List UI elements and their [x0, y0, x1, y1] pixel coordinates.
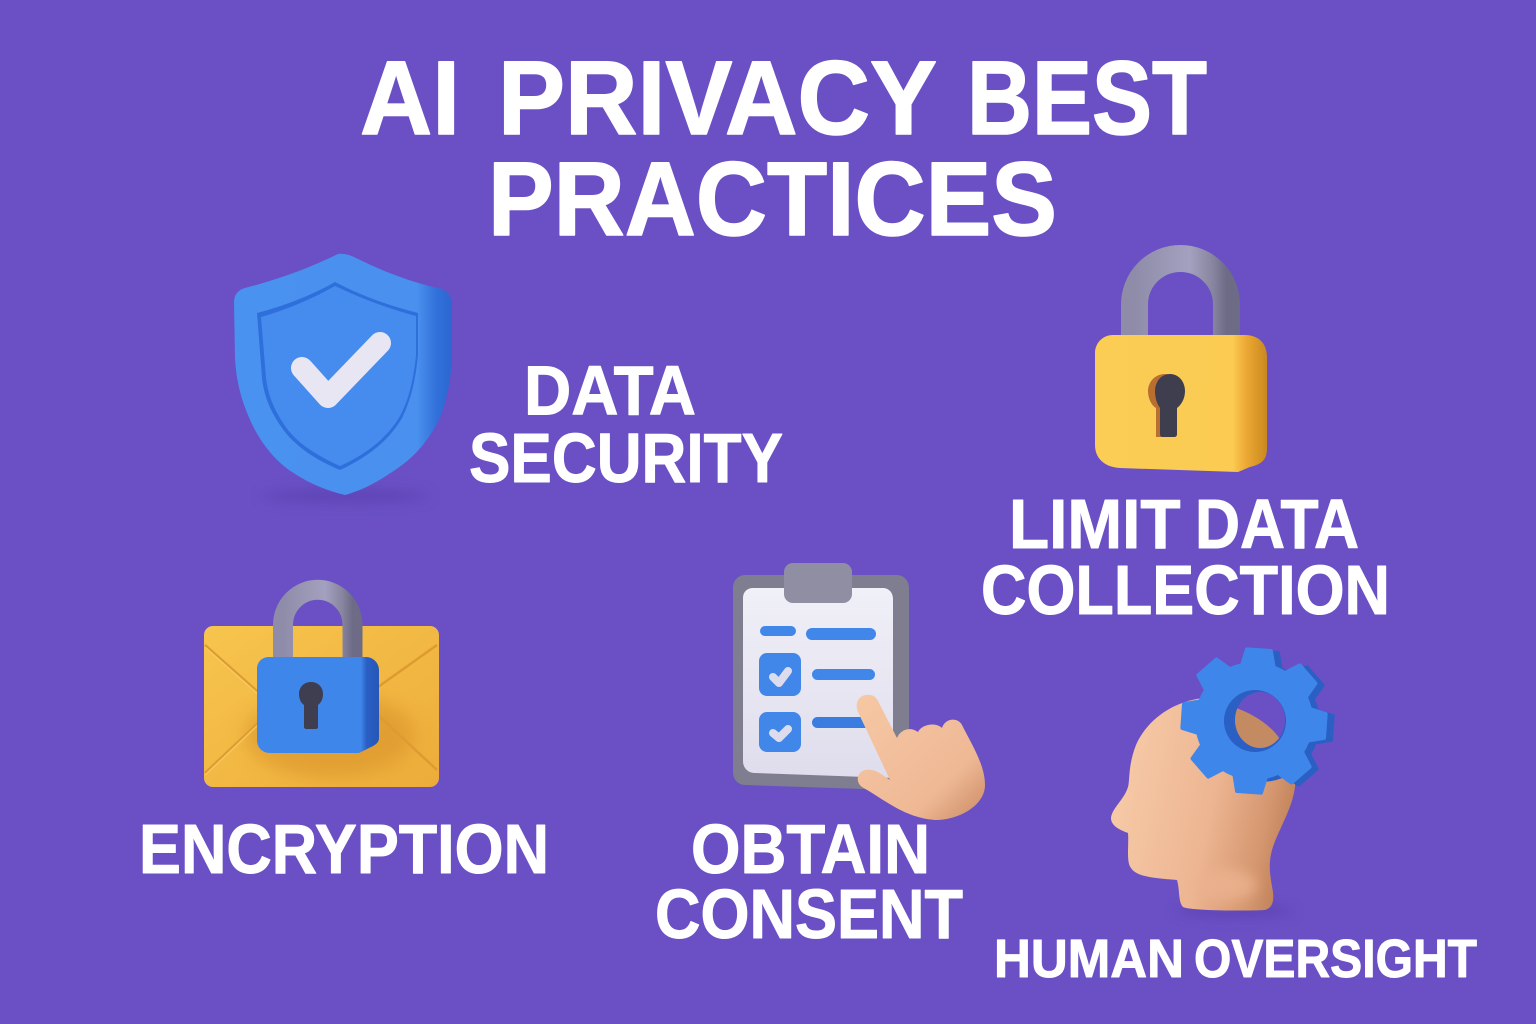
icon: shield with check	[234, 254, 452, 503]
label: data security: SECURITY	[469, 419, 783, 497]
title: PRACTICES	[488, 141, 1057, 258]
icon detail: check mark	[302, 343, 380, 397]
label: data security: DATA	[524, 352, 696, 430]
label: data security	[469, 352, 783, 497]
title: BEST	[967, 40, 1207, 157]
icon: clipboard with hand	[733, 563, 985, 820]
icon: envelope with lock	[204, 590, 439, 787]
label: human oversight: OVERSIGHT	[1194, 929, 1477, 989]
icon: yellow padlock	[1095, 258, 1267, 472]
label: limit data collection: COLLECTION	[981, 551, 1390, 629]
icon detail: pointing hand	[857, 695, 985, 820]
label: obtain consent: CONSENT	[655, 875, 963, 953]
label: human oversight: HUMAN	[994, 929, 1184, 989]
label: obtain consent: OBTAIN	[691, 810, 930, 888]
label: human oversight	[994, 929, 1477, 989]
icon: head with gear	[1111, 649, 1333, 917]
label: limit data collection: DATA	[1195, 485, 1359, 563]
icon detail: keyhole	[1148, 374, 1185, 437]
icon detail: head	[1111, 698, 1295, 911]
label: limit data collection	[981, 485, 1390, 629]
title: AI	[360, 40, 460, 157]
label: encryption: ENCRYPTION	[139, 810, 549, 888]
icon detail: gear	[1182, 649, 1333, 793]
label: limit data collection: LIMIT	[1009, 485, 1180, 563]
title	[360, 40, 1207, 258]
label: obtain consent	[655, 810, 963, 953]
icon detail: keyhole	[299, 682, 323, 729]
title: PRIVACY	[498, 40, 937, 157]
